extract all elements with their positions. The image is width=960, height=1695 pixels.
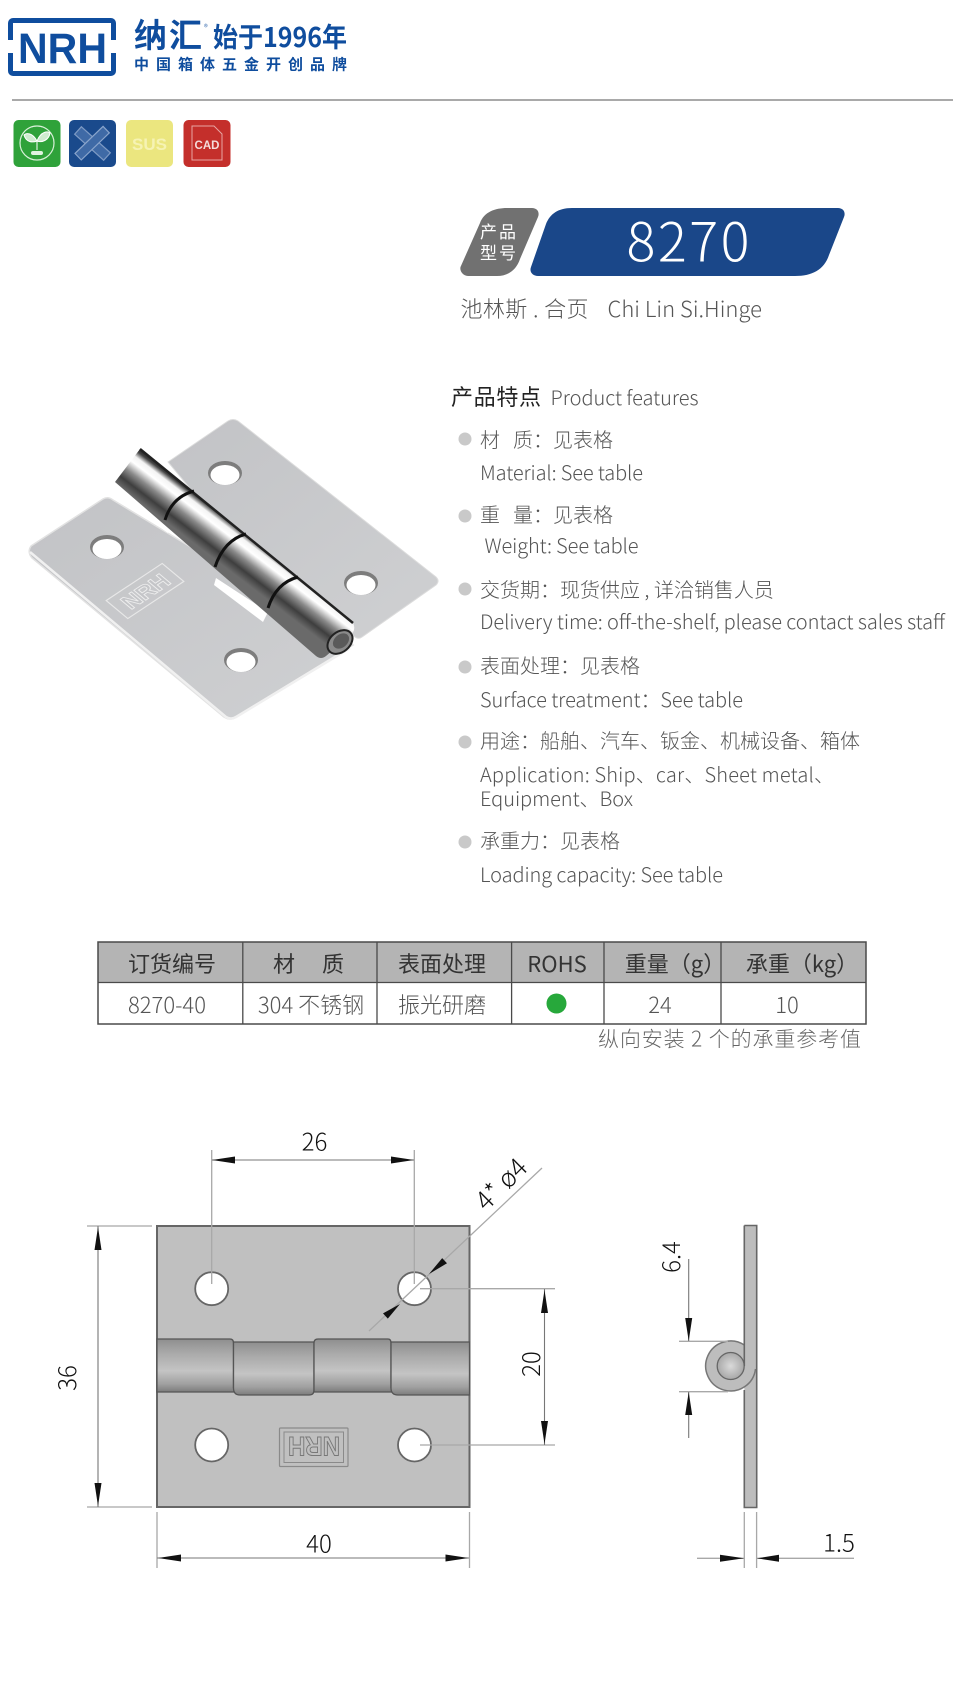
spec table: 重量（g） [625, 947, 725, 979]
spec table: 表面处理 [398, 947, 486, 979]
dimension: 36: 36 [48, 1365, 83, 1391]
dimension: 6.4: 6.4 [652, 1241, 687, 1273]
product model tag: 产品 [480, 218, 516, 243]
barrel [115, 449, 354, 658]
dimension: 40 [157, 1512, 470, 1568]
dimension: hole diameter 4*ø4 [369, 1149, 542, 1331]
mounting holes [90, 461, 378, 672]
feature: loading capacity: 承重力：见表格 [480, 825, 620, 854]
product name: Chi Lin Si.Hinge [608, 292, 762, 324]
product model tag: 8270 [626, 198, 750, 278]
back plate [168, 420, 438, 638]
stamped logo [280, 1428, 348, 1466]
brand slogan: 始于1996年 [213, 16, 347, 55]
spec table: 10 [775, 988, 799, 1020]
knuckle separators [165, 491, 298, 608]
ROHS compliant dot [546, 994, 566, 1014]
front view drawing [157, 1226, 470, 1507]
brand slogan [134, 9, 347, 74]
heading: product features: 产品特点 [451, 380, 541, 412]
stamped logo [106, 563, 184, 619]
feature: application: 用途：船舶、汽车、钣金、机械设备、箱体 [480, 725, 860, 754]
spec table: 材 [273, 947, 295, 979]
spec table [98, 942, 866, 1024]
feature: delivery: Delivery time: off-the-shelf, please contact sales staff [480, 606, 946, 635]
brand slogan: ® [204, 22, 208, 33]
feature: delivery: 交货期：现货供应 , 详洽销售人员 [480, 574, 774, 603]
product model tag [460, 198, 845, 278]
dimension: 26 [212, 1122, 414, 1284]
side view drawing [706, 1226, 757, 1508]
spec table: 振光研磨 [398, 988, 486, 1020]
feature: material: 质：见表格 [513, 424, 613, 453]
dimension: 6.4 [652, 1241, 728, 1438]
spec table: 8270-40 [128, 988, 206, 1020]
icon: pencil and ruler badge [69, 120, 116, 167]
feature: loading capacity [458, 825, 723, 888]
heading: product features [451, 380, 698, 412]
icon: green eco badge [14, 120, 60, 167]
feature: loading capacity: Loading capacity: See table [480, 859, 723, 888]
feature: surface treatment [458, 650, 743, 713]
feature: weight: 量：见表格 [513, 499, 613, 528]
hinge knuckles [157, 1339, 470, 1395]
icon: SUS badge: SUS [132, 135, 167, 154]
end cap [323, 625, 357, 659]
feature: surface treatment: 表面处理：见表格 [480, 650, 640, 679]
brand slogan: 中国箱体五金开创品牌 [134, 54, 347, 74]
feature: application [458, 725, 860, 812]
icon: CAD badge: CAD [195, 140, 219, 152]
feature: weight [458, 499, 638, 559]
spec table: 订货编号 [128, 947, 216, 979]
divider [12, 99, 953, 101]
icon: CAD badge [184, 120, 230, 167]
feature: weight: 重 [480, 499, 500, 528]
feature: delivery [458, 574, 946, 635]
dimension: 20: 20 [512, 1351, 547, 1377]
feature: material: Material: See table [480, 457, 643, 486]
product name: 池林斯 . 合页 [460, 292, 588, 324]
dimension: hole diameter 4*ø4: 4* ø4 [466, 1149, 535, 1218]
table footnote: 纵向安装 2 个的承重参考值 [598, 1024, 861, 1054]
feature: surface treatment: Surface treatment：See table [480, 684, 743, 713]
feature: weight: Weight: See table [484, 530, 638, 559]
stamped logo: NRH [288, 1431, 340, 1461]
logo: NRH: NRH [18, 25, 107, 73]
product photo: hinge [29, 420, 438, 719]
dimension: 20 [420, 1289, 555, 1445]
icon: SUS badge [126, 120, 173, 167]
dimension: 1.5: 1.5 [823, 1524, 855, 1558]
dimension: 40: 40 [306, 1524, 332, 1560]
dimension: 36 [48, 1226, 152, 1507]
brand slogan: 纳汇 [134, 9, 202, 57]
feature: application: Application: Ship、car、Sheet metal、 [480, 759, 834, 788]
product model tag: 型号 [480, 239, 516, 264]
spec table: ROHS [527, 947, 587, 979]
spec table: 质 [322, 947, 344, 979]
holes [195, 1272, 228, 1305]
feature: material [458, 424, 643, 486]
slits [120, 486, 175, 533]
plate [157, 1226, 470, 1507]
heading: product features: Product features [550, 382, 698, 411]
product name [460, 292, 762, 324]
spec table: 24 [648, 988, 672, 1020]
dimension: 1.5 [697, 1512, 855, 1568]
front plate [29, 498, 353, 719]
spec table: 304 不锈钢 [258, 988, 364, 1020]
spec table: 承重（kg） [746, 947, 858, 979]
feature: application: Equipment、Box [480, 783, 633, 812]
feature: material: 材 [480, 424, 500, 453]
dimension: 26: 26 [302, 1122, 327, 1158]
stamped logo: NRH [115, 569, 176, 613]
